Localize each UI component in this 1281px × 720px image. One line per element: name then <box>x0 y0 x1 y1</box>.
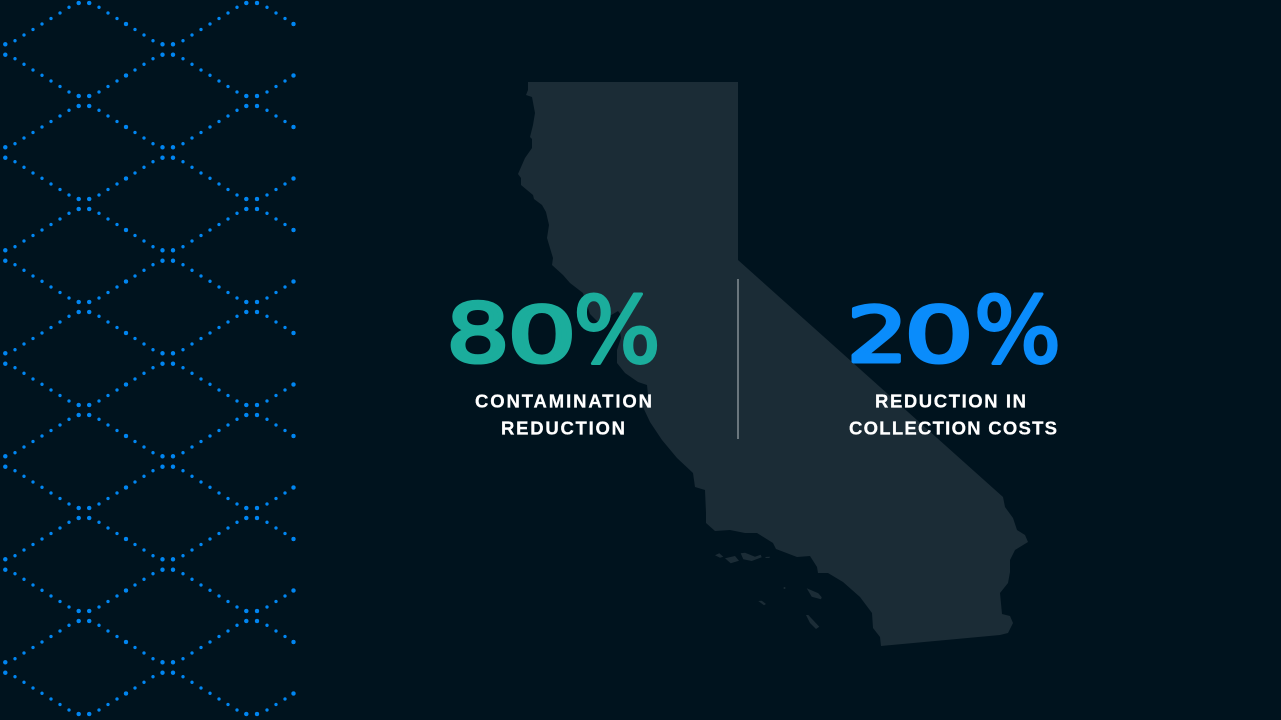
map of California <box>518 82 1028 646</box>
islands <box>715 553 822 629</box>
label: reduction in collection costs: COLLECTION COSTS <box>849 418 1057 438</box>
dotted diamond pattern <box>3 1 296 716</box>
digit 0: 0 <box>508 291 576 380</box>
percent sign: % <box>573 277 661 384</box>
stat: 80% <box>446 277 661 438</box>
label: contamination reduction: REDUCTION <box>501 418 625 438</box>
label: reduction in collection costs <box>849 390 1057 438</box>
stat: 20% <box>847 277 1061 438</box>
digit 8: 8 <box>446 288 510 381</box>
label: contamination reduction <box>475 390 652 438</box>
digit 2: 2 <box>847 292 908 380</box>
label: reduction in collection costs: REDUCTION IN <box>875 390 1026 412</box>
percent sign: % <box>974 277 1061 384</box>
divider line <box>738 279 739 439</box>
label: contamination reduction: CONTAMINATION <box>475 390 652 412</box>
digit 0: 0 <box>905 291 973 380</box>
